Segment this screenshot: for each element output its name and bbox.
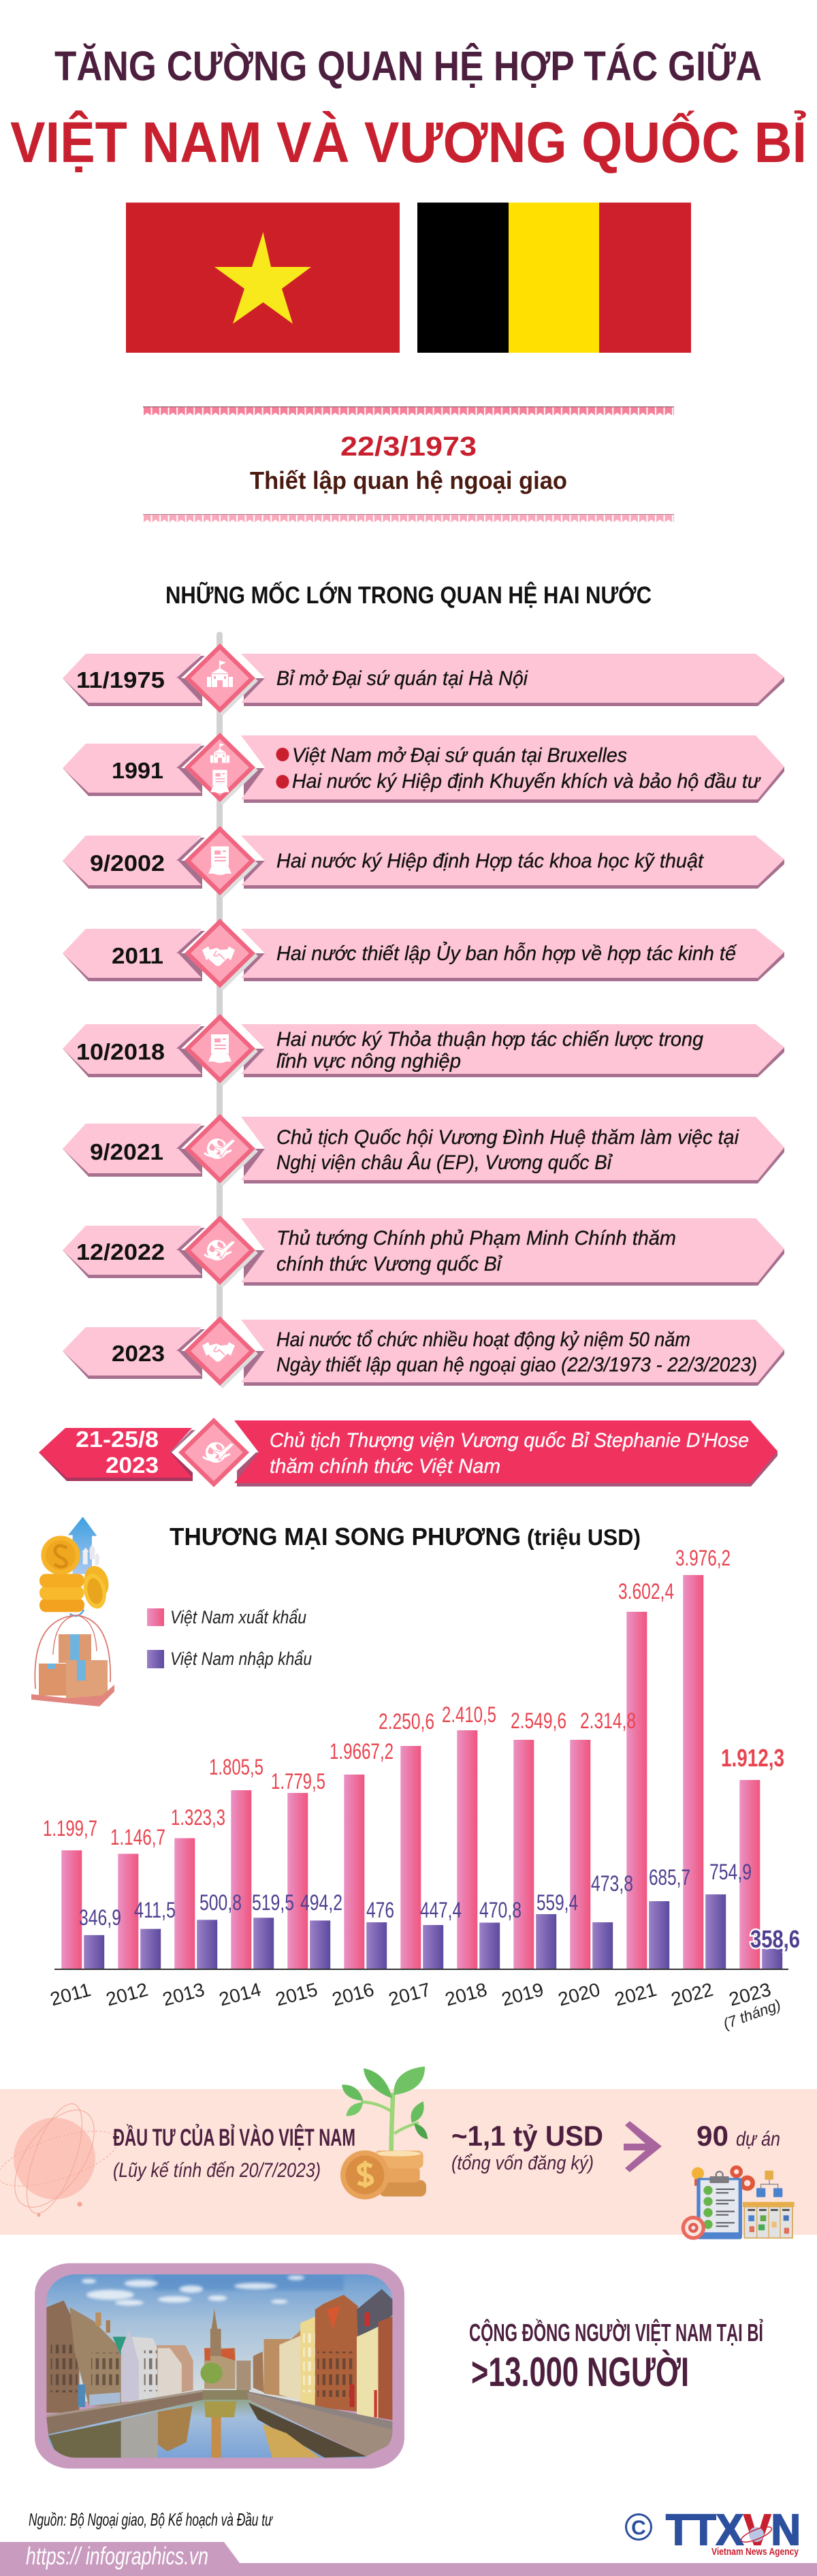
year axis labels: 2018 — [443, 1979, 490, 2010]
export value labels: 1.323,3 — [171, 1805, 225, 1830]
timeline row: 2011 — [63, 919, 784, 991]
import value labels: 754,9 — [709, 1860, 752, 1884]
icon: embassy building — [207, 661, 233, 687]
event text: thăm chính thức Việt Nam — [270, 1455, 500, 1478]
year axis labels: (7 tháng) — [721, 1996, 783, 2033]
stat: total registered capital: ~1,1 tỷ USD — [451, 2120, 603, 2152]
export value labels: 2.250,6 — [379, 1709, 434, 1734]
heading: bilateral trade: (triệu USD) — [527, 1525, 641, 1550]
icon: signed agreement — [208, 846, 231, 875]
photo: Bruges canal in rounded frame — [35, 2263, 404, 2468]
timeline row: 9/2002 — [63, 826, 784, 898]
timeline row: 11/1975 — [63, 643, 784, 716]
year axis labels: 2016 — [330, 1979, 377, 2010]
bars: Vietnam imports — [84, 1894, 782, 1969]
event text: Hai nước tổ chức nhiều hoạt động kỷ niệm 50 năm — [276, 1329, 690, 1351]
event text: chính thức Vương quốc Bỉ — [276, 1253, 502, 1275]
date label: 2011 — [112, 943, 163, 968]
flag: Belgium — [417, 203, 691, 353]
footer band — [0, 2542, 817, 2576]
logo: TTXVN: Vietnam News Agency — [711, 2546, 799, 2558]
import value labels — [79, 1860, 800, 1953]
event text: Việt Nam mở Đại sứ quán tại Bruxelles — [292, 744, 627, 767]
copyright mark — [626, 2514, 651, 2540]
date label: 12/2022 — [76, 1239, 165, 1265]
year axis labels: 2011 — [48, 1979, 93, 2010]
import value labels: 500,8 — [199, 1890, 242, 1915]
import value labels: 470,8 — [479, 1898, 522, 1922]
icon: signed agreement — [210, 770, 229, 793]
timeline row: 10/2018 — [63, 1014, 784, 1086]
year axis labels: 2019 — [499, 1979, 546, 2010]
bunting decoration top — [143, 407, 674, 416]
year axis labels: 2013 — [160, 1979, 207, 2010]
event text: Chủ tịch Thượng viện Vương quốc Bỉ Stephanie D'Hose — [270, 1429, 749, 1452]
export value labels: 1.912,3 — [721, 1744, 784, 1772]
panel: investment — [0, 2067, 817, 2240]
stat: projects count: 90 — [696, 2120, 728, 2152]
event text: Hai nước thiết lập Ủy ban hỗn hợp về hợp tác kinh tế — [276, 941, 737, 965]
date: establishment of relations: 22/3/1973 — [340, 432, 477, 462]
icon: projects clipboard — [682, 2165, 795, 2240]
stat: community size: >13.000 NGƯỜI — [471, 2349, 689, 2395]
arrow — [624, 2121, 662, 2172]
event text: Hai nước ký Hiệp định Hợp tác khoa học kỹ thuật — [276, 850, 705, 872]
date label: 10/2018 — [76, 1039, 165, 1064]
export value labels: 1.805,5 — [209, 1755, 263, 1779]
caption: establishment of relations: Thiết lập quan hệ ngoại giao — [250, 466, 567, 494]
icon: coins, arrow and parcels — [31, 1516, 114, 1706]
export value labels: 1.199,7 — [43, 1816, 97, 1841]
event text: Chủ tịch Quốc hội Vương Đình Huệ thăm làm việc tại — [276, 1126, 739, 1149]
heading: Belgian investment: ĐẦU TƯ CỦA BỈ VÀO VIỆT NAM — [113, 2124, 355, 2151]
export value labels: 2.410,5 — [442, 1702, 496, 1727]
import value labels: 358,6 — [750, 1925, 800, 1953]
year axis labels: 2014 — [217, 1979, 263, 2010]
import value labels: 346,9 — [79, 1905, 121, 1930]
export value labels: 2.549,6 — [511, 1708, 566, 1733]
import value labels: 494,2 — [300, 1890, 342, 1915]
source note: Nguồn: Bộ Ngoại giao, Bộ Kế hoạch và Đầu tư — [29, 2509, 273, 2530]
date label: 21-25/8 — [76, 1427, 159, 1452]
event text: Ngày thiết lập quan hệ ngoại giao (22/3/1973 - 22/3/2023) — [276, 1354, 757, 1376]
timeline row: 9/2021 — [63, 1114, 784, 1186]
export value labels: 3.976,2 — [675, 1546, 731, 1570]
timeline row: 21-25/8 2023 highlight — [39, 1413, 778, 1493]
export value labels: 1.9667,2 — [330, 1739, 394, 1764]
icon: embassy building — [210, 743, 229, 763]
date label: 1991 — [112, 758, 163, 783]
event text: Nghị viện châu Âu (EP), Vương quốc Bỉ — [276, 1151, 613, 1174]
flag: Vietnam — [126, 203, 400, 353]
heading: bilateral trade: THƯƠNG MẠI SONG PHƯƠNG — [170, 1523, 521, 1551]
chart legend: Việt Nam nhập khẩu — [170, 1649, 312, 1669]
year axis labels: 2015 — [273, 1979, 320, 2010]
import value labels: 476 — [366, 1898, 394, 1922]
baseline — [54, 1969, 788, 1970]
import value labels: 473,8 — [591, 1871, 633, 1896]
bullet — [276, 748, 289, 761]
import value labels: 685,7 — [649, 1865, 690, 1890]
export value labels: 2.314,8 — [580, 1708, 636, 1733]
logo: TTXVN: TTXVN — [666, 2505, 801, 2554]
caption: total registered capital: (tổng vốn đăng ký) — [451, 2152, 594, 2174]
icon: handshake — [202, 947, 235, 966]
icon: handshake — [202, 1342, 235, 1362]
export value labels: 1.779,5 — [271, 1769, 325, 1794]
year axis labels — [48, 1979, 783, 2033]
bullet — [276, 775, 289, 789]
date label: 2023 — [106, 1452, 159, 1478]
timeline row: 1991 — [63, 733, 784, 805]
icon: plant on coins — [340, 2067, 428, 2199]
year axis labels: 2012 — [103, 1979, 150, 2010]
year axis labels: 2022 — [669, 1979, 716, 2010]
bar chart: bilateral trade — [43, 1546, 800, 2033]
import value labels: 559,4 — [536, 1890, 578, 1915]
heading: milestones: NHỮNG MỐC LỚN TRONG QUAN HỆ HAI NƯỚC — [165, 582, 652, 609]
date label: 11/1975 — [76, 667, 165, 693]
icon: signed agreement — [208, 1034, 231, 1063]
export value labels: 3.602,4 — [618, 1579, 674, 1604]
date label: 9/2002 — [90, 850, 165, 876]
timeline axis — [217, 632, 223, 1354]
chart legend: Việt Nam xuất khẩu — [170, 1607, 306, 1627]
footer url: https:// infographics.vn — [26, 2542, 208, 2570]
event text: Hai nước ký Thỏa thuận hợp tác chiến lược trong — [276, 1028, 703, 1051]
icon: globe and plane — [203, 1442, 234, 1463]
note: cumulative date: (Lũy kế tính đến 20/7/2023) — [113, 2159, 321, 2182]
icon: globe and plane — [204, 1240, 236, 1260]
event text: Bỉ mở Đại sứ quán tại Hà Nội — [276, 667, 528, 690]
date label: 2023 — [112, 1341, 165, 1366]
timeline row: 2023 — [63, 1316, 784, 1388]
year axis labels: 2017 — [386, 1979, 433, 2010]
icon: globe and plane — [204, 1139, 236, 1159]
event text: lĩnh vực nông nghiệp — [276, 1050, 461, 1072]
bunting decoration bottom — [143, 514, 674, 523]
export value labels: 1.146,7 — [110, 1825, 165, 1849]
timeline row: 12/2022 — [63, 1215, 784, 1288]
copyright mark: C — [631, 2517, 646, 2539]
event text: Hai nước ký Hiệp định Khuyến khích và bảo hộ đầu tư — [292, 770, 761, 793]
year axis labels: 2023 — [726, 1979, 773, 2010]
year axis labels: 2020 — [556, 1979, 603, 2010]
chart legend — [147, 1607, 312, 1669]
date label: 9/2021 — [90, 1139, 163, 1164]
caption: projects: dự án — [736, 2128, 780, 2150]
event text: Thủ tướng Chính phủ Phạm Minh Chính thăm — [276, 1227, 676, 1250]
import value labels: 519,5 — [252, 1890, 294, 1915]
year axis labels: 2021 — [612, 1979, 659, 2010]
import value labels: 447,4 — [420, 1898, 462, 1922]
bars: Vietnam exports — [61, 1575, 760, 1969]
decoration: orbit globe — [0, 2097, 124, 2221]
import value labels: 411,5 — [134, 1898, 176, 1922]
export value labels — [43, 1546, 784, 1849]
